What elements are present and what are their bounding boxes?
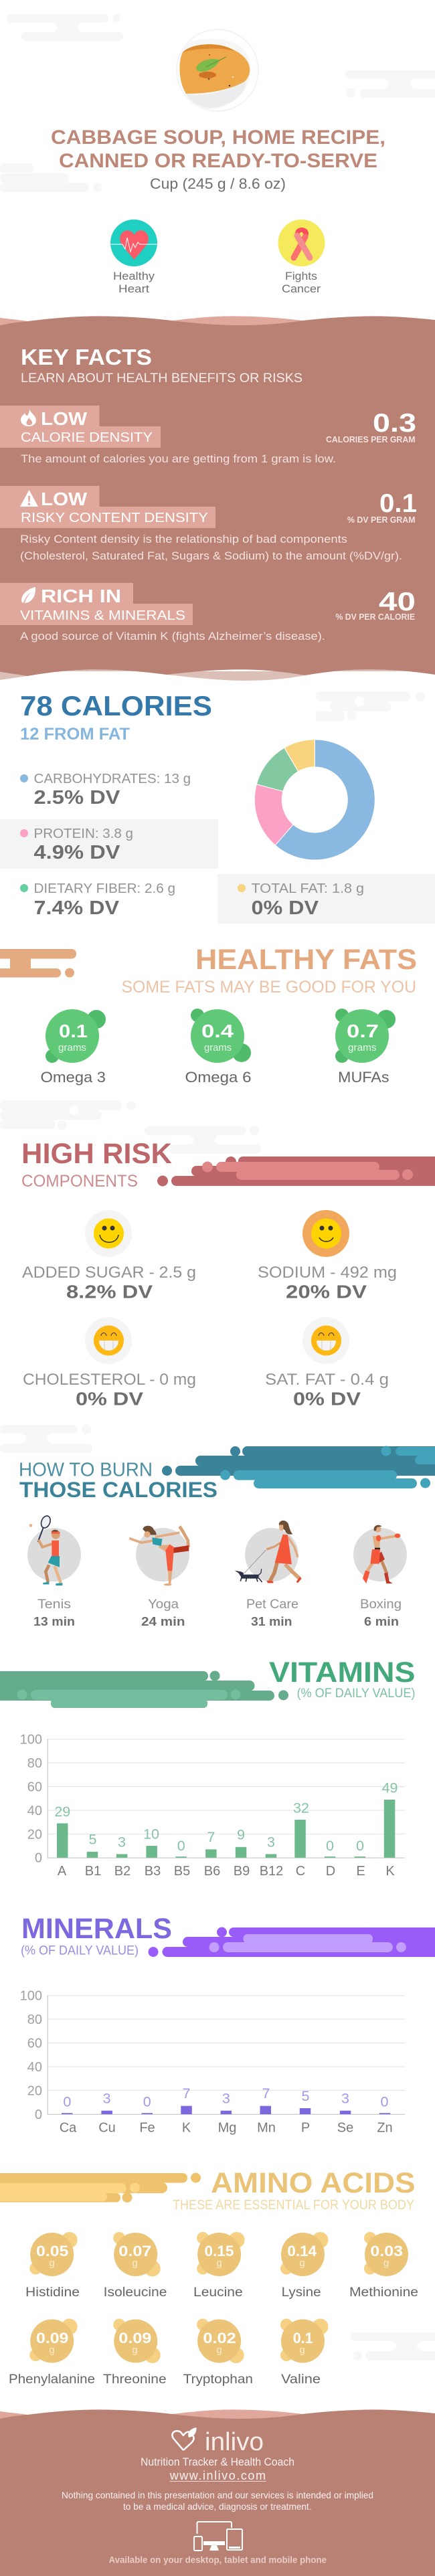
icon: warning triangle bbox=[20, 490, 38, 507]
benefit: healthy heart: Healthy bbox=[113, 270, 155, 282]
bar chart: vitamins: 0 bbox=[35, 1851, 42, 1866]
bar chart: vitamins: B2 bbox=[114, 1864, 130, 1879]
bar chart: vitamins: 49 bbox=[382, 1780, 398, 1796]
sodium: SODIUM - 492 mg bbox=[258, 1264, 397, 1282]
bar chart: minerals: Zn bbox=[377, 2121, 393, 2136]
heading bbox=[122, 944, 417, 997]
heading: KEY FACTS bbox=[21, 345, 152, 369]
activity: pet care: 31 min bbox=[251, 1615, 292, 1628]
heading: SOME FATS MAY BE GOOD FOR YOU bbox=[122, 978, 416, 997]
bar chart: vitamins: 9 bbox=[237, 1827, 245, 1843]
amino: lysine: Lysine bbox=[282, 2286, 321, 2300]
heading: MINERALS bbox=[21, 1913, 172, 1945]
tagline: Nutrition Tracker & Health Coach bbox=[141, 2456, 294, 2468]
header bars bbox=[0, 949, 87, 977]
amino: isoleucine: g bbox=[132, 2257, 138, 2269]
website link: www.inlivo.com bbox=[169, 2469, 266, 2482]
amino: tryptophan: g bbox=[216, 2344, 222, 2356]
bar chart: vitamins bbox=[20, 1733, 405, 1879]
amino: threonine: g bbox=[132, 2344, 138, 2356]
saturated fat bbox=[265, 1317, 389, 1409]
bar chart: minerals: 3 bbox=[103, 2091, 111, 2107]
activity: tennis: 13 min bbox=[33, 1615, 75, 1628]
heading: LEARN ABOUT HEALTH BENEFITS OR RISKS bbox=[21, 371, 302, 385]
bar chart: minerals: Se bbox=[337, 2121, 353, 2136]
mufas: MUFAs bbox=[338, 1069, 389, 1086]
bar chart: minerals: 3 bbox=[341, 2091, 349, 2107]
bar chart: vitamins: C bbox=[296, 1864, 305, 1879]
bar chart: minerals: 3 bbox=[222, 2091, 230, 2107]
heading: (% OF DAILY VALUE) bbox=[297, 1687, 415, 1701]
bar chart: vitamins: 5 bbox=[89, 1832, 97, 1848]
omega 6: Omega 6 bbox=[185, 1069, 252, 1086]
bar chart: minerals: 0 bbox=[35, 2108, 42, 2122]
amino: histidine: g bbox=[49, 2257, 55, 2269]
title: CANNED OR READY-TO-SERVE bbox=[59, 150, 377, 172]
activity: boxing: Boxing bbox=[360, 1598, 402, 1612]
added sugar bbox=[22, 1210, 196, 1302]
amino: valine: Valine bbox=[281, 2373, 321, 2387]
heading bbox=[21, 1138, 172, 1191]
legend: dietary fiber bbox=[20, 881, 175, 919]
heading bbox=[20, 690, 212, 744]
fact: low calorie density: LOW bbox=[41, 408, 88, 429]
fact: low risky content density: % DV PER GRAM bbox=[347, 515, 415, 525]
amino: leucine bbox=[193, 2232, 245, 2300]
amino: leucine: 0.15 bbox=[205, 2243, 234, 2259]
amino: lysine: g bbox=[299, 2257, 305, 2269]
bar chart: minerals: 0 bbox=[381, 2094, 389, 2110]
heading: 12 FROM FAT bbox=[20, 725, 130, 744]
legend: carbohydrates: 2.5% DV bbox=[33, 787, 120, 808]
amino: isoleucine: Isoleucine bbox=[104, 2286, 167, 2300]
logo: inlivo bbox=[172, 2427, 264, 2456]
sodium: 20% DV bbox=[286, 1281, 367, 1302]
heading: THOSE CALORIES bbox=[19, 1478, 217, 1502]
amino: threonine: Threonine bbox=[103, 2373, 167, 2387]
fact: low calorie density bbox=[0, 406, 416, 465]
heading: VITAMINS bbox=[269, 1656, 415, 1689]
amino: tryptophan: Tryptophan bbox=[183, 2373, 253, 2387]
logo: inlivo: inlivo bbox=[205, 2428, 264, 2456]
bar chart: minerals: 0 bbox=[143, 2094, 151, 2110]
bar chart: minerals: 100 bbox=[20, 1989, 42, 2004]
heading bbox=[269, 1656, 415, 1701]
bar chart: minerals: P bbox=[301, 2121, 310, 2136]
sodium bbox=[258, 1210, 397, 1302]
amino: histidine: 0.05 bbox=[36, 2243, 68, 2259]
heading: 78 CALORIES bbox=[20, 690, 212, 721]
activity: yoga: 24 min bbox=[141, 1615, 185, 1628]
title bbox=[51, 126, 385, 172]
bar chart: vitamins: B6 bbox=[204, 1864, 220, 1879]
amino: isoleucine: 0.07 bbox=[118, 2243, 151, 2259]
fact: rich in vitamins and minerals: 40 bbox=[379, 588, 416, 616]
bar chart: vitamins: 0 bbox=[326, 1838, 334, 1854]
amino: valine: 0.1 bbox=[293, 2330, 313, 2346]
amino: isoleucine bbox=[104, 2232, 167, 2300]
icon: flame bbox=[21, 409, 36, 426]
added sugar: 8.2% DV bbox=[66, 1281, 153, 1302]
omega 6: grams bbox=[204, 1042, 232, 1053]
amino: phenylalanine: 0.09 bbox=[36, 2330, 68, 2346]
legend: dietary fiber: 7.4% DV bbox=[33, 897, 120, 919]
bar chart: minerals bbox=[20, 1989, 405, 2136]
fact: rich in vitamins and minerals: RICH IN bbox=[41, 586, 121, 606]
activity: boxing bbox=[353, 1525, 407, 1628]
footer panel bbox=[0, 2409, 435, 2576]
amino: phenylalanine: g bbox=[49, 2344, 55, 2356]
bar chart: vitamins: D bbox=[326, 1864, 335, 1879]
bar chart: minerals: 60 bbox=[27, 2036, 42, 2051]
bar chart: vitamins: B1 bbox=[85, 1864, 101, 1879]
bar chart: vitamins: 7 bbox=[207, 1829, 215, 1845]
header bars bbox=[0, 1670, 288, 1708]
disclaimer bbox=[62, 2490, 373, 2512]
legend: protein: 4.9% DV bbox=[33, 842, 120, 863]
bar chart: vitamins: 0 bbox=[356, 1838, 364, 1854]
fact: low calorie density: The amount of calories you are getting from 1 gram is low. bbox=[21, 453, 336, 465]
bar chart: minerals: Ca bbox=[60, 2121, 77, 2136]
legend: total fat bbox=[217, 874, 435, 924]
omega 3: 0.1 bbox=[59, 1021, 88, 1041]
bar chart: vitamins: B3 bbox=[145, 1864, 161, 1879]
legend: protein bbox=[0, 819, 218, 869]
fact: low risky content density: LOW bbox=[41, 489, 88, 509]
legend: total fat: 0% DV bbox=[252, 897, 319, 919]
amino: histidine: Histidine bbox=[25, 2286, 80, 2300]
bar chart: vitamins: 20 bbox=[27, 1827, 42, 1842]
title: CABBAGE SOUP, HOME RECIPE, bbox=[51, 126, 385, 149]
fact: low calorie density: CALORIES PER GRAM bbox=[326, 435, 415, 444]
heading: HOW TO BURN bbox=[19, 1459, 153, 1480]
added sugar: ADDED SUGAR - 2.5 g bbox=[22, 1264, 196, 1282]
bar chart: minerals: Cu bbox=[98, 2121, 116, 2136]
fact: low calorie density: 0.3 bbox=[373, 409, 416, 438]
benefit: healthy heart bbox=[110, 220, 157, 295]
bar chart: minerals: 0 bbox=[63, 2094, 71, 2110]
bar chart: minerals: Mg bbox=[218, 2121, 236, 2136]
icon: leaf bbox=[21, 587, 35, 603]
bar chart: vitamins: 29 bbox=[54, 1804, 70, 1820]
bar chart: vitamins: 60 bbox=[27, 1780, 42, 1795]
panel: amino acids bbox=[0, 2167, 418, 2387]
amino: methionine: g bbox=[383, 2257, 389, 2269]
omega 3 bbox=[40, 1009, 106, 1086]
omega 3: grams bbox=[58, 1042, 86, 1053]
heading: HEALTHY FATS bbox=[195, 944, 417, 976]
header bars bbox=[149, 1927, 435, 1957]
mufas: 0.7 bbox=[347, 1021, 379, 1041]
saturated fat: SAT. FAT - 0.4 g bbox=[265, 1371, 389, 1389]
bar chart: vitamins: E bbox=[356, 1864, 365, 1879]
benefit: fights cancer: Fights bbox=[285, 270, 317, 282]
bar chart: vitamins: 100 bbox=[20, 1733, 42, 1747]
heading bbox=[21, 345, 302, 385]
omega 6: 0.4 bbox=[201, 1021, 234, 1041]
icon: soup bowl photo bbox=[177, 29, 258, 111]
activity: yoga bbox=[129, 1526, 189, 1628]
fact: rich in vitamins and minerals bbox=[0, 583, 416, 642]
fact: rich in vitamins and minerals: VITAMINS & MINERALS bbox=[20, 608, 185, 623]
legend: carbohydrates: CARBOHYDRATES: 13 g bbox=[33, 772, 191, 786]
heading: THESE ARE ESSENTIAL FOR YOUR BODY bbox=[173, 2198, 414, 2213]
donut chart bbox=[254, 740, 375, 860]
cholesterol: 0% DV bbox=[76, 1388, 143, 1409]
bar chart: vitamins: B9 bbox=[234, 1864, 250, 1879]
fact: low risky content density: 0.1 bbox=[379, 489, 417, 518]
amino: valine: g bbox=[299, 2344, 305, 2356]
amino: phenylalanine: Phenylalanine bbox=[9, 2373, 95, 2387]
activity: boxing: 6 min bbox=[364, 1615, 399, 1628]
activity: pet care: Pet Care bbox=[246, 1598, 298, 1612]
amino: leucine: Leucine bbox=[193, 2286, 243, 2300]
legend: dietary fiber: DIETARY FIBER: 2.6 g bbox=[33, 881, 175, 896]
benefit: fights cancer bbox=[278, 220, 325, 295]
panel: high risk components bbox=[21, 1138, 435, 1409]
amino: methionine: Methionine bbox=[349, 2286, 418, 2300]
panel: healthy fats bbox=[0, 944, 417, 1086]
fact: rich in vitamins and minerals: A good source of Vitamin K (fights Alzheimer’s disease). bbox=[20, 630, 325, 642]
bar chart: vitamins: 32 bbox=[293, 1800, 309, 1816]
panel: minerals bbox=[20, 1913, 435, 2136]
heading: HIGH RISK bbox=[21, 1138, 172, 1170]
panel: vitamins bbox=[0, 1656, 415, 1879]
bar chart: vitamins: B12 bbox=[260, 1864, 283, 1879]
mufas bbox=[335, 1009, 396, 1086]
disclaimer: to be a medical advice, diagnosis or treatment. bbox=[123, 2501, 312, 2512]
bar chart: minerals: Fe bbox=[139, 2121, 155, 2136]
omega 6 bbox=[185, 1009, 252, 1086]
bar chart: minerals: 7 bbox=[262, 2085, 270, 2101]
panel: how to burn those calories bbox=[19, 1446, 435, 1628]
bar chart: vitamins: 80 bbox=[27, 1756, 42, 1771]
saturated fat: 0% DV bbox=[293, 1388, 361, 1409]
amino: valine bbox=[280, 2318, 328, 2387]
mufas: grams bbox=[348, 1042, 376, 1053]
amino: lysine: 0.14 bbox=[287, 2243, 317, 2259]
header: soup and title bbox=[51, 29, 385, 295]
heading bbox=[173, 2167, 415, 2213]
header bars bbox=[162, 1446, 435, 1488]
legend: total fat: TOTAL FAT: 1.8 g bbox=[252, 881, 364, 896]
amino: phenylalanine bbox=[9, 2318, 95, 2387]
amino: lysine bbox=[280, 2232, 328, 2300]
amino: tryptophan bbox=[183, 2318, 253, 2387]
disclaimer: Nothing contained in this presentation and our services is intended or implied bbox=[62, 2490, 373, 2500]
bar chart: minerals: Mn bbox=[257, 2121, 276, 2136]
bar chart: minerals: 80 bbox=[27, 2012, 42, 2027]
panel: key facts bbox=[0, 316, 435, 681]
fact: low risky content density: Risky Content density is the relationship of bad components bbox=[20, 533, 347, 545]
activity: tennis: Tenis bbox=[37, 1598, 71, 1612]
bar chart: minerals: 40 bbox=[27, 2060, 42, 2075]
amino: methionine bbox=[349, 2232, 418, 2300]
fact: low calorie density: CALORIE DENSITY bbox=[21, 430, 153, 445]
fact: rich in vitamins and minerals: % DV PER CALORIE bbox=[336, 612, 415, 622]
activity: pet care bbox=[235, 1521, 302, 1628]
icon: devices bbox=[194, 2522, 242, 2551]
bar chart: vitamins: 40 bbox=[27, 1804, 42, 1818]
amino: leucine: g bbox=[216, 2257, 222, 2269]
cholesterol: CHOLESTEROL - 0 mg bbox=[23, 1371, 196, 1389]
cholesterol bbox=[23, 1317, 196, 1409]
legend: protein: PROTEIN: 3.8 g bbox=[33, 827, 133, 841]
amino: tryptophan: 0.02 bbox=[203, 2330, 236, 2346]
activity: yoga: Yoga bbox=[148, 1598, 179, 1612]
panel: calories bbox=[0, 690, 435, 924]
bar chart: minerals: 7 bbox=[183, 2085, 190, 2101]
amino: threonine bbox=[103, 2318, 167, 2387]
benefit: fights cancer: Cancer bbox=[282, 282, 321, 295]
benefit: healthy heart: Heart bbox=[118, 282, 149, 295]
bar chart: minerals: 5 bbox=[302, 2088, 310, 2104]
bar chart: minerals: 20 bbox=[27, 2083, 42, 2098]
bar chart: vitamins: 3 bbox=[267, 1834, 275, 1850]
activity: tennis bbox=[27, 1515, 81, 1628]
bar chart: vitamins: B5 bbox=[174, 1864, 190, 1879]
bar chart: vitamins: K bbox=[385, 1864, 395, 1879]
header bars bbox=[0, 2172, 201, 2203]
amino: methionine: 0.03 bbox=[370, 2243, 403, 2259]
fact: low risky content density bbox=[0, 486, 417, 562]
serving size: Cup (245 g / 8.6 oz) bbox=[150, 175, 286, 192]
bar chart: vitamins: A bbox=[58, 1864, 67, 1879]
fact: low risky content density: RISKY CONTENT DENSITY bbox=[21, 511, 208, 525]
heading: AMINO ACIDS bbox=[211, 2167, 415, 2199]
amino: threonine: 0.09 bbox=[118, 2330, 151, 2346]
header bars bbox=[157, 1156, 435, 1186]
heading: (% OF DAILY VALUE) bbox=[21, 1944, 139, 1958]
availability note: Available on your desktop, tablet and mobile phone bbox=[108, 2554, 327, 2565]
heading bbox=[19, 1459, 217, 1502]
bar chart: vitamins: 0 bbox=[177, 1838, 185, 1854]
bar chart: vitamins: 10 bbox=[143, 1826, 159, 1842]
amino: histidine bbox=[25, 2232, 80, 2300]
omega 3: Omega 3 bbox=[40, 1069, 106, 1086]
bar chart: vitamins: 3 bbox=[118, 1834, 126, 1850]
heading: COMPONENTS bbox=[21, 1172, 138, 1191]
fact: low risky content density: (Cholesterol, Saturated Fat, Sugars & Sodium) to the amount (%DV/gr). bbox=[20, 550, 402, 562]
legend: carbohydrates bbox=[20, 772, 191, 808]
bar chart: minerals: K bbox=[182, 2121, 191, 2136]
